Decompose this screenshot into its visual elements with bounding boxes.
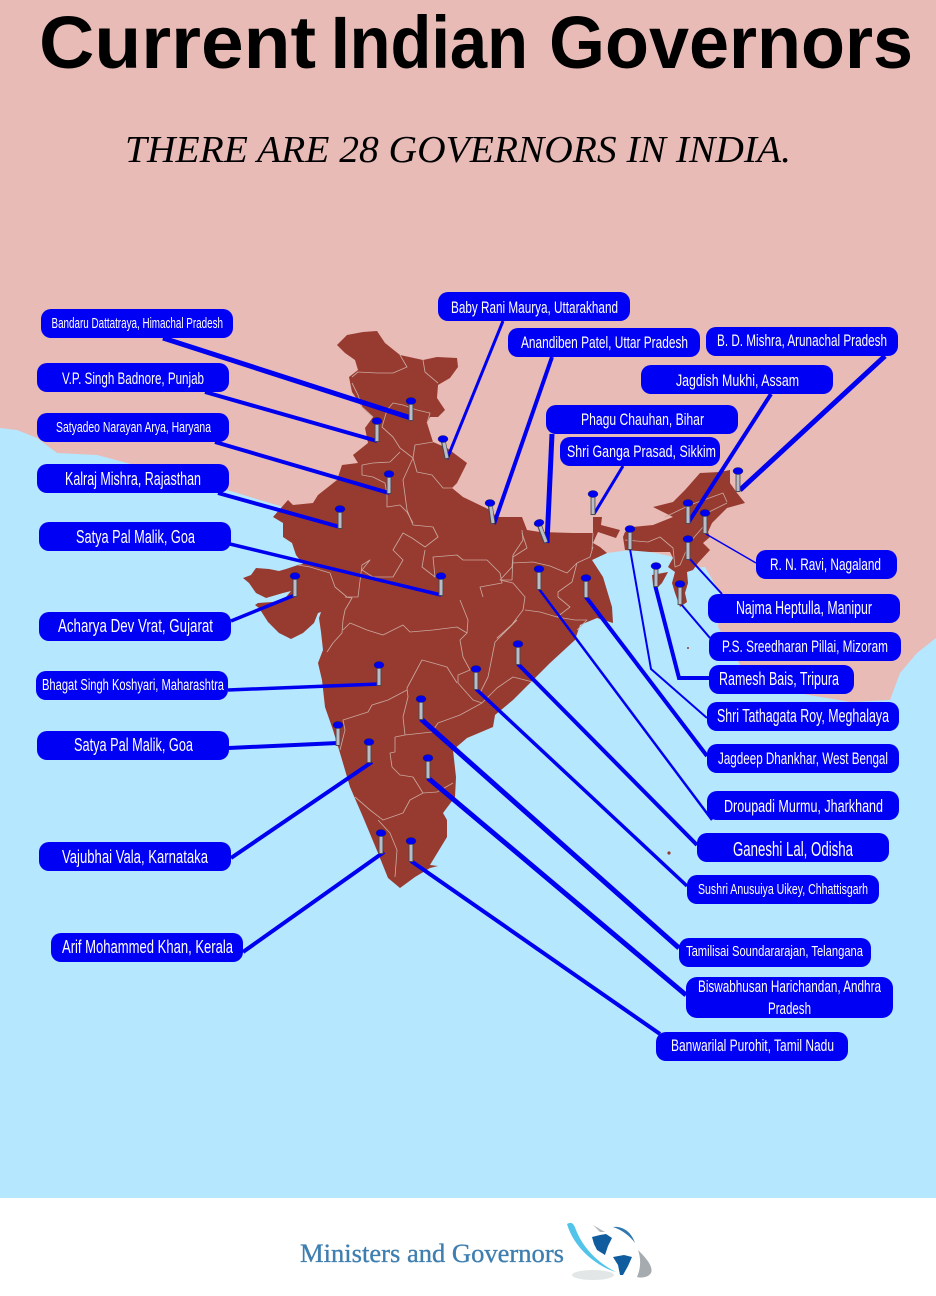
label: Satya Pal Malik, upper: Satya Pal Malik, Goa [76, 527, 196, 547]
leader: Karnataka [231, 762, 372, 858]
footer band [0, 1198, 936, 1296]
leader: Uttar Pradesh [494, 357, 552, 524]
map of India [243, 331, 745, 888]
label: Bihar [546, 405, 738, 434]
label: Satya Pal Malik, lower: Satya Pal Malik, Goa [74, 735, 194, 755]
label: Nagaland [756, 550, 897, 579]
label: Karnataka [39, 842, 231, 871]
label: Tamil Nadu [656, 1032, 848, 1061]
pin: West Bengal [581, 574, 591, 598]
pin: Maharashtra [374, 662, 384, 686]
leader: Assam [688, 394, 771, 523]
pin: Assam [683, 500, 693, 524]
leader: Goa [229, 743, 338, 748]
pin: Kerala [376, 830, 386, 854]
label: Odisha: Ganeshi Lal, Odisha [733, 839, 854, 861]
label: Satya Pal Malik, lower [37, 731, 229, 760]
pin: Odisha [513, 640, 523, 665]
label: Telangana [679, 938, 871, 967]
label: Mizoram [709, 632, 901, 661]
label: Gujarat: Acharya Dev Vrat, Gujarat [58, 616, 213, 636]
label: Manipur [708, 594, 900, 623]
label: Maharashtra: Bhagat Singh Koshyari, Maharashtra [42, 677, 224, 694]
title: Governors [549, 1, 913, 84]
label: Himachal Pradesh [41, 309, 233, 338]
label: Telangana: Tamilisai Soundararajan, Telangana [686, 943, 863, 960]
leader: Punjab [205, 392, 377, 441]
leader: Uttarakhand [447, 321, 503, 459]
label: West Bengal [707, 744, 899, 773]
title [39, 1, 913, 84]
pin: Himachal Pradesh [406, 398, 416, 421]
logo wordmark: Ministers and Governors [300, 1239, 564, 1268]
leader: Arunachal Pradesh [740, 356, 885, 490]
label: Kerala: Arif Mohammed Khan, Kerala [62, 937, 234, 957]
map pins [290, 398, 743, 862]
label: Odisha [697, 833, 889, 862]
leader: Nagaland [706, 534, 756, 563]
pin: Haryana [384, 470, 394, 494]
pin: Chhattisgarh [471, 666, 481, 690]
leader: Chhattisgarh [476, 689, 687, 886]
label: Tripura [709, 665, 854, 694]
map: islands [667, 647, 689, 873]
leader: Bihar [547, 434, 552, 543]
subtitle: THERE ARE 28 GOVERNORS IN INDIA. [125, 129, 791, 171]
pin: Jharkhand [534, 566, 544, 590]
label: Rajasthan: Kalraj Mishra, Rajasthan [65, 469, 201, 489]
map: state boundaries [298, 355, 727, 877]
label: Andhra Pradesh [686, 977, 893, 1018]
pin: Meghalaya [625, 526, 635, 550]
leader: Mizoram [681, 604, 710, 638]
label: Satya Pal Malik, upper [39, 522, 231, 551]
leader lines [163, 321, 885, 1034]
label: Tripura: Ramesh Bais, Tripura [719, 669, 840, 689]
leader: Andhra Pradesh [428, 778, 686, 995]
leader: Haryana [215, 442, 389, 493]
pin: Andhra Pradesh [423, 754, 433, 779]
footer logo [300, 1223, 652, 1280]
pin: Rajasthan [335, 506, 345, 529]
label: Manipur: Najma Heptulla, Manipur [736, 598, 872, 618]
label: Andhra Pradesh: Pradesh [768, 999, 811, 1018]
label: Sikkim: Shri Ganga Prasad, Sikkim [567, 442, 716, 461]
leader: Tamil Nadu [411, 861, 660, 1034]
map: mainland [243, 331, 620, 888]
pin: Arunachal Pradesh [733, 468, 743, 492]
pin: Gujarat [290, 572, 300, 597]
label: Kerala [51, 933, 243, 962]
pin: Goa [333, 722, 343, 746]
label: Assam: Jagdish Mukhi, Assam [676, 371, 799, 390]
label: Uttar Pradesh: Anandiben Patel, Uttar Pradesh [521, 333, 688, 352]
leader: Manipur [689, 558, 722, 594]
label: Chhattisgarh: Sushri Anusuiya Uikey, Chhattisgarh [698, 881, 868, 898]
governor labels [36, 292, 901, 1061]
label: Punjab [37, 363, 229, 392]
pin: Tamil Nadu [406, 838, 416, 862]
label: Gujarat [39, 612, 231, 641]
pin: Bihar [533, 518, 546, 543]
pin: Manipur [683, 536, 693, 560]
leader: Jharkhand [539, 589, 712, 820]
label: Uttar Pradesh [508, 328, 700, 357]
label: Nagaland: R. N. Ravi, Nagaland [770, 555, 881, 574]
map: Tripura [652, 572, 668, 587]
map: north-east states [623, 470, 745, 607]
title: Indian [331, 1, 528, 84]
label: Arunachal Pradesh [706, 327, 898, 356]
pin: Sikkim [588, 490, 598, 515]
leader: Maharashtra [228, 684, 379, 690]
label: Himachal Pradesh: Bandaru Dattatraya, Himachal Pradesh [52, 316, 223, 332]
label: Uttarakhand [438, 292, 630, 321]
leader: Gujarat [231, 595, 295, 621]
leader: West Bengal [586, 597, 707, 756]
background: land mass [0, 0, 936, 702]
leader: Odisha [518, 664, 697, 845]
pin: Madhya Pradesh [436, 572, 446, 596]
label: Uttarakhand: Baby Rani Maurya, Uttarakhand [451, 298, 618, 317]
label: Haryana: Satyadeo Narayan Arya, Haryana [56, 419, 211, 436]
label: Bihar: Phagu Chauhan, Bihar [581, 410, 704, 429]
pin: Karnataka [364, 738, 374, 763]
leader: Sikkim [594, 466, 623, 514]
label: Maharashtra [36, 671, 228, 700]
label: Rajasthan [37, 464, 229, 493]
label: Assam [641, 365, 833, 394]
pin: Telangana [416, 696, 426, 720]
pin: Uttar Pradesh [485, 500, 495, 524]
pin: Punjab [372, 418, 382, 442]
leader: Madhya Pradesh pin [230, 544, 441, 595]
leader: Kerala [243, 852, 384, 952]
leader: Himachal Pradesh [163, 338, 411, 418]
label: Tamil Nadu: Banwarilal Purohit, Tamil Nadu [671, 1036, 834, 1055]
title: Current [39, 1, 316, 84]
logo icon: globe [567, 1223, 652, 1280]
leader: Rajasthan [218, 493, 340, 527]
label: Jharkhand [707, 791, 899, 820]
label: Chhattisgarh [687, 875, 879, 904]
label: Haryana [37, 413, 229, 442]
label: Punjab: V.P. Singh Badnore, Punjab [62, 369, 204, 388]
label: Sikkim [560, 437, 720, 466]
pin: Mizoram [675, 580, 685, 605]
leader: Tripura [655, 585, 709, 678]
leader: Meghalaya [630, 549, 707, 718]
leader: Telangana [421, 719, 679, 948]
pin: Tripura [651, 562, 661, 587]
label: Meghalaya [707, 702, 899, 731]
label: Karnataka: Vajubhai Vala, Karnataka [62, 847, 209, 867]
pin: Uttarakhand [438, 436, 448, 459]
pin: Nagaland [700, 510, 710, 534]
